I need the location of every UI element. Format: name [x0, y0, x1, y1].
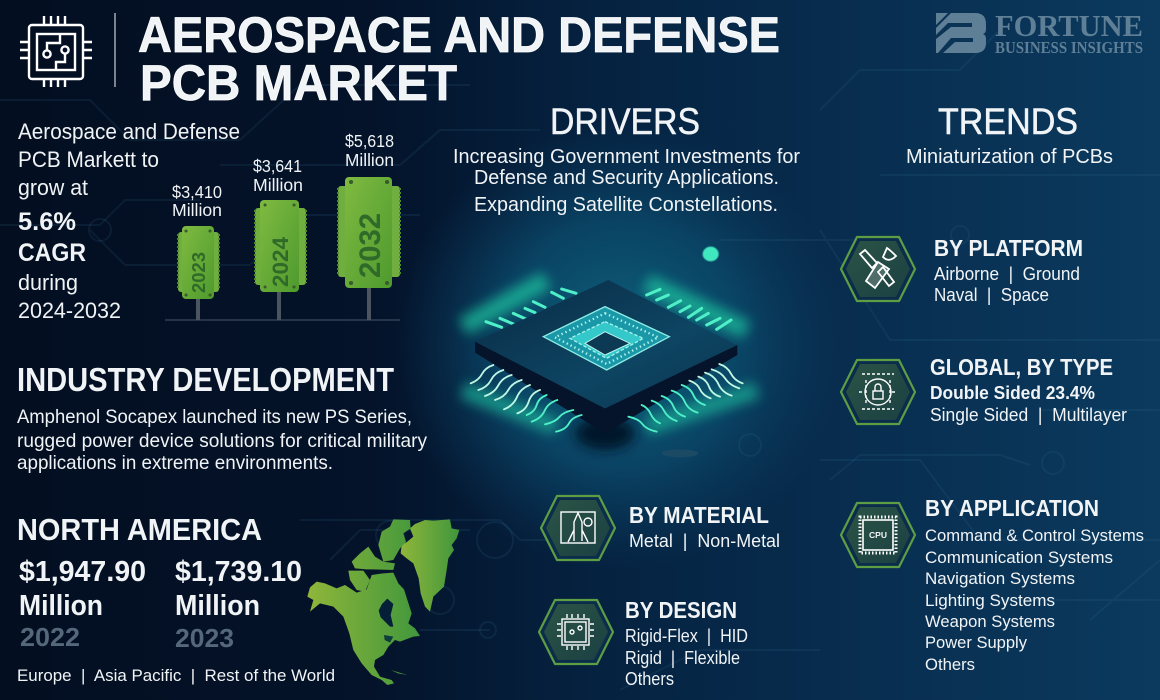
text block: drivers: [453, 146, 800, 216]
CAGR text block: CAGR: [18, 239, 86, 267]
title: [138, 7, 780, 111]
text block: trends: Miniaturization of PCBs: [906, 146, 1113, 168]
logo: Fortune Business Insights: [936, 8, 1143, 57]
item: global by type: Double Sided 23.4%: [930, 383, 1095, 403]
heading: drivers: DRIVERS: [550, 101, 700, 142]
CAGR text block: 2024-2032: [18, 298, 121, 323]
CAGR text block: during: [18, 270, 78, 295]
icon: cpu: [841, 503, 915, 567]
bar chart: market size: [165, 131, 400, 320]
item: by application: Command & Control Systems: [925, 526, 1144, 545]
bar 2024: $3,641: [253, 156, 302, 176]
text block: industry development: Amphenol Socapex launched its new PS Series,: [17, 406, 412, 428]
upper pins: [486, 289, 731, 329]
chip body: [475, 342, 737, 433]
heading: trends: TRENDS: [938, 101, 1078, 142]
item: by application: BY APPLICATION: [925, 495, 1099, 521]
item: by application: Others: [925, 655, 975, 674]
item: by platform: Naval | Space: [934, 285, 1049, 305]
logo: Fortune Business Insights: FORTUNE: [995, 8, 1143, 43]
bar 2023: 2023: [189, 252, 209, 293]
bar 2023: Million: [172, 200, 222, 220]
item: by platform: Airborne | Ground: [934, 264, 1080, 284]
text block: industry development: [17, 406, 427, 474]
CAGR text block: PCB Markett to: [18, 147, 159, 172]
bar 2032: Million: [345, 150, 394, 170]
heading: industry development: INDUSTRY DEVELOPMENT: [17, 361, 394, 398]
bar 2024: Million: [253, 175, 303, 195]
item: global by type: GLOBAL, BY TYPE: [930, 354, 1113, 380]
CAGR text block: grow at: [18, 175, 88, 200]
logo: Fortune Business Insights: BUSINESS INSIGHTS: [995, 38, 1143, 57]
CAGR text block: Aerospace and Defense: [18, 119, 240, 144]
item: by application: Power Supply: [925, 633, 1027, 652]
item: by design: Rigid-Flex | HID: [625, 626, 748, 646]
item: by material: Metal | Non-Metal: [629, 531, 780, 551]
bar 2023: [172, 182, 222, 320]
item: by design: BY DESIGN: [625, 597, 737, 623]
icon: satellite: [841, 237, 915, 301]
text block: industry development: applications in extreme environments.: [17, 452, 333, 474]
panel: North America: Million: [175, 590, 260, 622]
lower right pins: [628, 364, 743, 432]
item: by application: [841, 495, 1144, 674]
icon: circuit lock: [841, 360, 915, 424]
item: by application: Weapon Systems: [925, 612, 1055, 631]
panel: North America: $1,739.10: [175, 556, 302, 588]
bar 2023: $3,410: [172, 182, 222, 202]
lower left pins: [471, 365, 582, 432]
bar 2024: [253, 156, 306, 320]
item: by material: [541, 496, 780, 560]
text block: industry development: rugged power device solutions for critical military: [17, 430, 427, 452]
icon: blueprint rocket: [541, 496, 615, 560]
panel: North America: Europe | Asia Pacific | Rest of the World: [17, 666, 335, 685]
item: global by type: [841, 354, 1127, 425]
item: by design: Others: [625, 669, 674, 689]
bar 2032: 2032: [354, 213, 387, 278]
bar 2024: 2024: [268, 237, 293, 287]
panel: North America: [17, 512, 335, 685]
illustration: chip: [463, 247, 757, 457]
item: by platform: BY PLATFORM: [934, 235, 1083, 261]
item: by platform: [841, 235, 1083, 305]
title: AEROSPACE AND DEFENSE: [138, 7, 780, 63]
text block: drivers: Expanding Satellite Constellations.: [474, 194, 778, 216]
text block: drivers: Increasing Government Investments for: [453, 146, 800, 168]
item: by design: Rigid | Flexible: [625, 648, 740, 668]
icon: circuit chip: [539, 600, 613, 664]
item: by application: Lighting Systems: [925, 591, 1055, 610]
bar 2032: $5,618: [345, 131, 394, 151]
title: PCB MARKET: [140, 55, 457, 111]
item: global by type: Single Sided | Multilayer: [930, 405, 1127, 425]
panel: North America: 2022: [20, 622, 80, 652]
panel: North America: NORTH AMERICA: [17, 512, 262, 547]
icon: chip logo: [20, 16, 92, 87]
CAGR text block: [18, 119, 240, 323]
panel: North America: 2023: [175, 623, 234, 653]
text block: drivers: Defense and Security Applications.: [474, 167, 779, 189]
CAGR text block: 5.6%: [18, 208, 76, 236]
item: by application: Communication Systems: [925, 548, 1113, 567]
map: North America: [307, 519, 459, 685]
panel: North America: Million: [19, 590, 103, 622]
item: by material: BY MATERIAL: [629, 502, 769, 528]
chip core: [543, 307, 669, 370]
item: by application: Navigation Systems: [925, 569, 1075, 588]
item: by design: [539, 597, 748, 689]
panel: North America: $1,947.90: [19, 556, 146, 588]
icon: cpu: CPU: [869, 530, 887, 540]
bar 2032: [338, 131, 400, 320]
divider: [114, 13, 116, 87]
